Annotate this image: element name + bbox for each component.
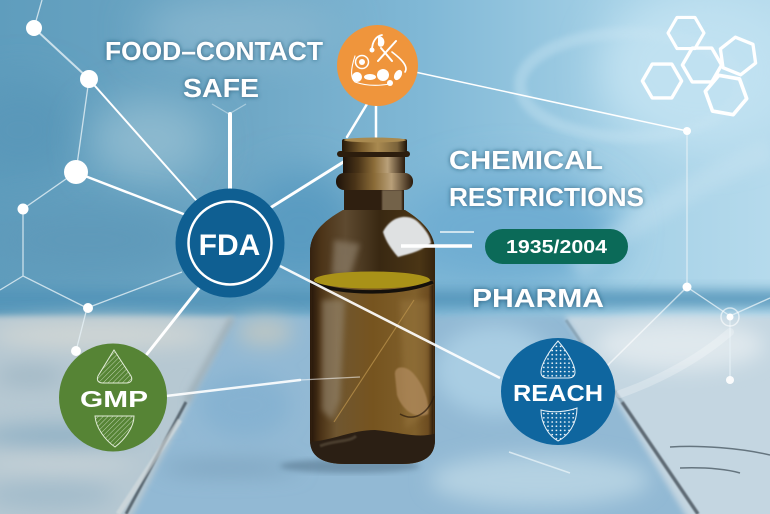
REACH badge: [501, 338, 615, 445]
network nodes right: [682, 127, 739, 384]
heading: chemical restrictions: [449, 145, 644, 212]
bottle lower neck: [344, 186, 404, 213]
amber bottle: [305, 138, 440, 470]
heading: chemical restrictions: CHEMICAL: [449, 145, 603, 175]
threaded neck: [343, 155, 405, 175]
overlay lines on bottle: [280, 246, 500, 380]
left label reflection: [322, 300, 345, 420]
background: wooden table planks: [0, 316, 770, 514]
REACH badge: REACH: [513, 380, 603, 406]
GMP badge: [59, 344, 167, 452]
heading: food-contact safe: FOOD–CONTACT: [105, 36, 323, 66]
network nodes left: [18, 20, 98, 356]
bottle body: [310, 210, 435, 464]
hand reflection: [395, 367, 428, 416]
icon: upper drop: [541, 341, 575, 378]
liquid surface: [314, 272, 430, 288]
left reflection: [332, 240, 360, 275]
heading: food-contact safe: SAFE: [183, 73, 259, 103]
FDA badge: FDA: [199, 229, 260, 262]
shoulder ring: [336, 173, 413, 190]
icon: lower drop: [541, 408, 577, 441]
icon: orange recycling badge: [337, 25, 418, 106]
recycling glyphs: [352, 35, 406, 86]
GMP badge: GMP: [80, 386, 148, 412]
liquid: [312, 285, 433, 470]
1935/2004 pill: [485, 229, 628, 264]
plank tones: [0, 318, 765, 509]
label: pharma: PHARMA: [472, 283, 604, 313]
bottle base: [310, 430, 435, 464]
1935/2004 pill: 1935/2004: [506, 237, 607, 257]
lip: [342, 139, 407, 152]
background: blue wall: [0, 0, 770, 330]
right warm reflection: [400, 300, 428, 430]
icon: upper leaf: [97, 350, 132, 383]
icon: hexagon molecule: [642, 17, 762, 117]
planks: [0, 316, 770, 514]
heading: chemical restrictions: RESTRICTIONS: [449, 182, 644, 212]
FDA badge: [176, 188, 284, 298]
shoulder glass: [310, 210, 435, 280]
shoulder highlight: [383, 217, 431, 257]
thread collar: [337, 151, 410, 157]
heading: food-contact safe: [105, 36, 323, 103]
connector lines behind bottle: [85, 72, 730, 396]
icon: lower leaf: [95, 416, 134, 447]
plank gaps: [186, 318, 232, 402]
